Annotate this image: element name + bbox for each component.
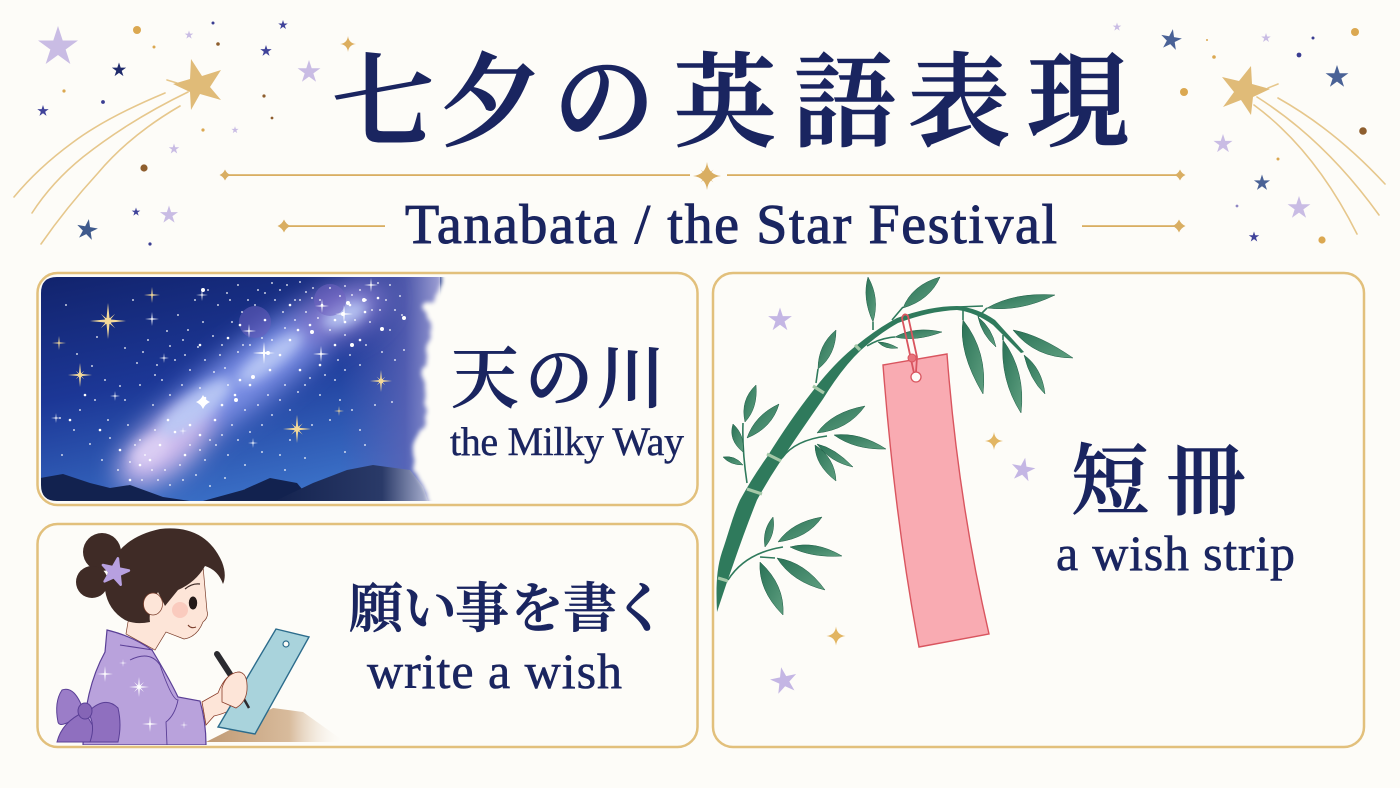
- table: [206, 708, 328, 742]
- decoration: left shooting star and stars: [14, 20, 356, 246]
- hand: [222, 672, 247, 708]
- star field: [60, 282, 404, 490]
- neck and face: [126, 566, 208, 650]
- panel: the Milky Way: [30, 261, 698, 510]
- mountains: [40, 465, 428, 501]
- decoration: right shooting star and stars: [1113, 22, 1385, 244]
- label: 願い事を書く: 願い事を書く: [349, 579, 667, 639]
- illustration: pink tanzaku strip: [883, 314, 989, 647]
- panel stars: [768, 308, 1037, 695]
- title: 七夕の英語表現: [332, 48, 1129, 161]
- obi bow: [57, 689, 120, 742]
- panel: write a wish: [38, 524, 698, 747]
- arm: [202, 672, 246, 725]
- leaves: [723, 277, 1073, 615]
- gold sparkle stars: [52, 287, 392, 443]
- kimono: [83, 630, 206, 745]
- panel: a wish strip: [713, 273, 1364, 747]
- face details: [172, 584, 200, 628]
- pen: [217, 654, 249, 708]
- watercolor night sky illustration: [41, 277, 446, 501]
- illustration: girl in kimono writing: [57, 528, 345, 745]
- twigs: [728, 306, 1003, 580]
- ear: [144, 593, 162, 615]
- label: the Milky Way: the Milky Way: [450, 419, 684, 464]
- card: [218, 629, 309, 734]
- label: write a wish: write a wish: [367, 643, 622, 699]
- kimono sparkle pattern: [97, 659, 188, 732]
- label: a wish strip: a wish strip: [1056, 525, 1295, 581]
- illustration: bamboo branch: [717, 277, 1073, 615]
- header: [220, 48, 1186, 256]
- hair star ornament: [102, 557, 130, 586]
- label: 天の川: 天の川: [451, 341, 665, 417]
- stalk: [717, 306, 1024, 612]
- divider with gold star: [220, 162, 1186, 190]
- subtitle: Tanabata / the Star Festival: [405, 194, 1057, 256]
- subtitle side rules: [278, 220, 1186, 232]
- hair: [105, 528, 225, 623]
- label: 短冊: 短冊: [1071, 438, 1245, 525]
- hair buns: [76, 533, 121, 598]
